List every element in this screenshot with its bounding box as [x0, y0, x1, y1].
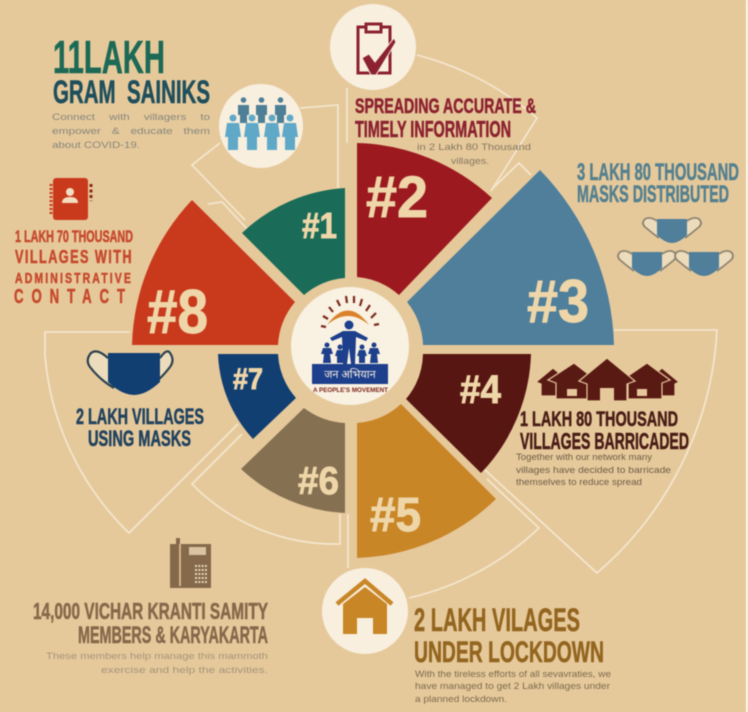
description: themselves to reduce spread — [516, 477, 642, 488]
description: villages. — [451, 156, 489, 167]
sector #3: #3 — [527, 268, 589, 335]
sector #2: #2 — [366, 165, 428, 230]
icon: telephone — [170, 538, 211, 588]
sector #3 — [407, 170, 614, 345]
center logo — [291, 287, 409, 405]
description — [417, 142, 531, 167]
heading line two: MEMBERS & KARYAKARTA — [78, 622, 268, 649]
panel: masks distributed text — [577, 159, 739, 208]
description: empower & educate them — [52, 126, 210, 137]
description: have managed to get 2 Lakh villages under — [415, 681, 610, 692]
panel: villages barricaded text — [516, 408, 689, 488]
icon: face mask — [88, 351, 172, 395]
icon: clipboard — [330, 4, 416, 90]
sector #7: #7 — [233, 363, 263, 396]
panel: administrative contact text — [14, 227, 133, 308]
panel: administrative contact text: VILLAGES WITH — [15, 247, 133, 267]
panel: accurate information text — [355, 95, 536, 167]
sector #5 — [357, 404, 496, 558]
sector #1 — [242, 188, 345, 295]
logo tagline: A PEOPLE'S MOVEMENT — [313, 387, 388, 394]
panel: administrative contact text: 1 LAKH 70 THOUSAND — [15, 227, 133, 246]
sector #4: #4 — [460, 368, 502, 412]
description — [516, 452, 671, 488]
sector #5: #5 — [370, 489, 421, 542]
heading line two: TIMELY INFORMATION — [355, 116, 511, 142]
panel: lockdown text — [414, 602, 611, 705]
description: Together with our network many — [516, 452, 652, 463]
sector #7 — [218, 354, 296, 439]
description — [46, 651, 268, 676]
heading: 11LAKH — [53, 31, 165, 83]
panel: villages using masks text: 2 LAKH VILLAGES — [76, 404, 204, 429]
description — [52, 112, 210, 151]
logo banner: जन अभियान — [324, 368, 377, 383]
description: a planned lockdown. — [415, 694, 507, 705]
heading line two: UNDER LOCKDOWN — [414, 636, 604, 669]
heading: 1 LAKH 80 THOUSAND — [520, 408, 678, 431]
panel: administrative contact text: ADMINISTRATIVE — [15, 270, 133, 287]
sector #6 — [241, 408, 345, 513]
description — [415, 669, 611, 705]
heading: 2 LAKH VILAGES — [414, 602, 580, 638]
sector #6: #6 — [298, 460, 339, 503]
description: villages have decided to barricade — [516, 465, 671, 476]
panel: villages using masks text — [76, 404, 204, 451]
sector #1: #1 — [302, 205, 337, 246]
icon: address book — [51, 178, 91, 220]
description: about COVID-19. — [52, 140, 140, 151]
panel: villages using masks text: USING MASKS — [88, 426, 191, 451]
panel: administrative contact text: CONTACT — [14, 286, 133, 308]
panel: gram sainiks text — [52, 31, 210, 151]
logo rays — [321, 296, 379, 327]
panel: vichar kranti samity text — [33, 598, 268, 676]
sector #4 — [406, 354, 531, 473]
description: These members help manage this mammoth — [46, 651, 268, 662]
subheading: GRAM SAINIKS — [53, 74, 210, 110]
icon: three masks — [618, 218, 733, 276]
icon: house — [322, 568, 408, 654]
icon: houses — [536, 358, 679, 401]
sector #8 — [132, 200, 295, 347]
heading: 14,000 VICHAR KRANTI SAMITY — [33, 598, 268, 624]
sector #8: #8 — [147, 278, 208, 347]
description: With the tireless efforts of all sevavraties, we — [415, 669, 611, 680]
icon: people — [219, 84, 303, 168]
description: Connect with villagers to — [52, 112, 210, 123]
sector #2 — [357, 143, 492, 295]
description: in 2 Lakh 80 Thousand — [417, 142, 531, 153]
logo person and children — [321, 320, 380, 364]
logo sun arc — [327, 310, 369, 325]
description: exercise and help the activities. — [101, 665, 268, 676]
heading: SPREADING ACCURATE & — [355, 95, 536, 118]
